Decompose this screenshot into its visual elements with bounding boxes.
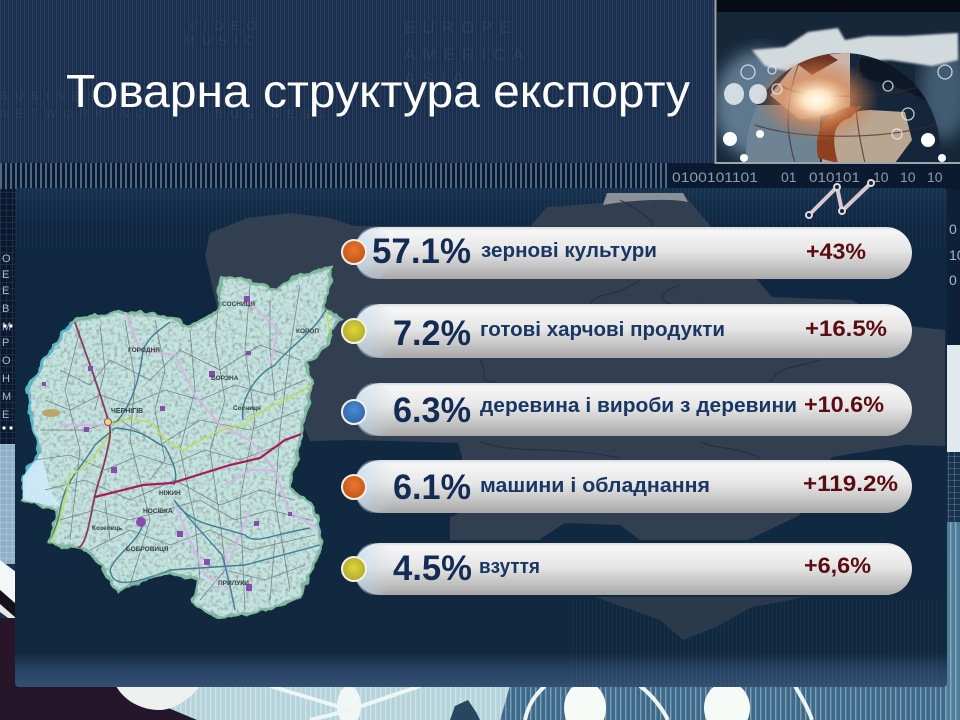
binary digits band: 10 [900,169,916,185]
world map backdrop [752,28,958,72]
map town labels [92,301,319,587]
share value: 4.5% [393,549,472,588]
share value: 6.3% [393,391,471,430]
district town marks [42,296,292,591]
binary digits band: 10 [873,169,889,185]
sun glare [755,58,879,142]
map of Chernihiv region [15,260,350,625]
growth value: +10.6% [804,392,884,417]
binary digits band: 010101 [809,169,860,185]
share value: 7.2% [393,314,471,353]
growth value: +6,6% [804,553,871,578]
map town labels: НІЖИН [159,490,181,497]
western cyan edge [23,322,70,500]
category label: машини і обладнання [480,475,710,497]
share value: 57.1% [372,232,471,271]
map town labels: ПРИЛУКИ [218,580,249,587]
background: ghost words: BUSINESS [0,89,117,103]
map town labels: СОСНИЦЯ [222,301,255,308]
left side strip: P [2,337,9,349]
background: ghost words: MUSIC [184,33,261,48]
title: Товарна структура експорту [66,65,690,117]
map town labels: ЧЕРНІГІВ [111,408,143,415]
ghost map of Ukraine [205,193,945,640]
growth value: +43% [806,239,866,264]
bottom background strip [0,682,960,720]
background: ghost words: ASIA [404,69,471,88]
category label: готові харчові продукти [480,319,725,341]
globe sphere [746,53,940,154]
icon: zigzag line chart [806,180,874,218]
growth value: +16.5% [805,316,887,341]
blue rivers [50,300,330,610]
background: ghost words [0,18,530,121]
binary digits band: 0100101101 [672,169,758,185]
left side strip: O [2,355,11,367]
bullet: blue [342,400,366,424]
row 5: footwear [342,543,912,595]
map town labels: Сосниця [233,405,261,412]
row 2: prepared food products [342,304,912,358]
background: ghost words: EUROPE [404,18,518,37]
forest patch [42,409,60,417]
left side strip [0,189,16,720]
background: ghost words: NETWORKING [0,107,153,121]
bullet: orange [342,475,366,499]
binary digits band [672,169,943,185]
left side blue glow [716,41,788,162]
left side strip: O [2,253,11,265]
bullet: orange [342,240,366,264]
category label: зернові культури [481,240,657,262]
map town labels: ГОРОДНЯ [128,347,160,354]
bullet: yellow [342,557,366,581]
left side strip: E [2,285,9,297]
background: ghost words: BUSINESS [215,107,332,121]
row 1: grain crops [342,227,912,279]
left side strip: M [2,391,11,403]
main railway lines [75,322,307,548]
photo: digital globe [714,0,960,164]
right side strip: 0 [949,272,957,288]
left side strip: M [2,321,11,333]
right side blue glow [920,40,960,140]
main dark panel [15,188,947,687]
district boundaries [35,285,315,610]
left side strip: B [2,303,9,315]
binary digits band: 01 [781,169,797,185]
growth value: +119.2% [803,471,898,496]
category label: деревина і вироби з деревини [480,395,797,417]
row 4: machinery and equipment [342,460,912,513]
binary digits band: 10 [927,169,943,185]
western flood plain [20,455,60,505]
Chernihiv city mark [104,418,112,426]
map town labels: БОРЗНА [211,375,239,382]
network icons [723,130,946,162]
background: dark striped band [0,163,960,189]
category label: взуття [479,556,540,578]
background: ghost words: VIDEO [188,18,263,33]
bullet: yellow [342,319,366,343]
left side strip: E [2,409,9,421]
pink district roads [60,300,320,590]
share value: 6.1% [393,468,471,507]
row 3: wood and wood products [342,383,912,436]
background: ghost words: AMERICA [404,45,530,64]
right side strip: 0 [949,221,957,237]
left side strip: E [2,269,9,281]
yellow-green borders [50,310,331,543]
left side strip: H [2,373,10,385]
right side strip [946,189,960,720]
map town labels: БОБРОВИЦЯ [126,546,169,553]
map town labels: НОСІВКА [143,508,173,515]
map town labels: КОРОП [296,328,319,335]
map town labels: Козелець [92,525,122,532]
